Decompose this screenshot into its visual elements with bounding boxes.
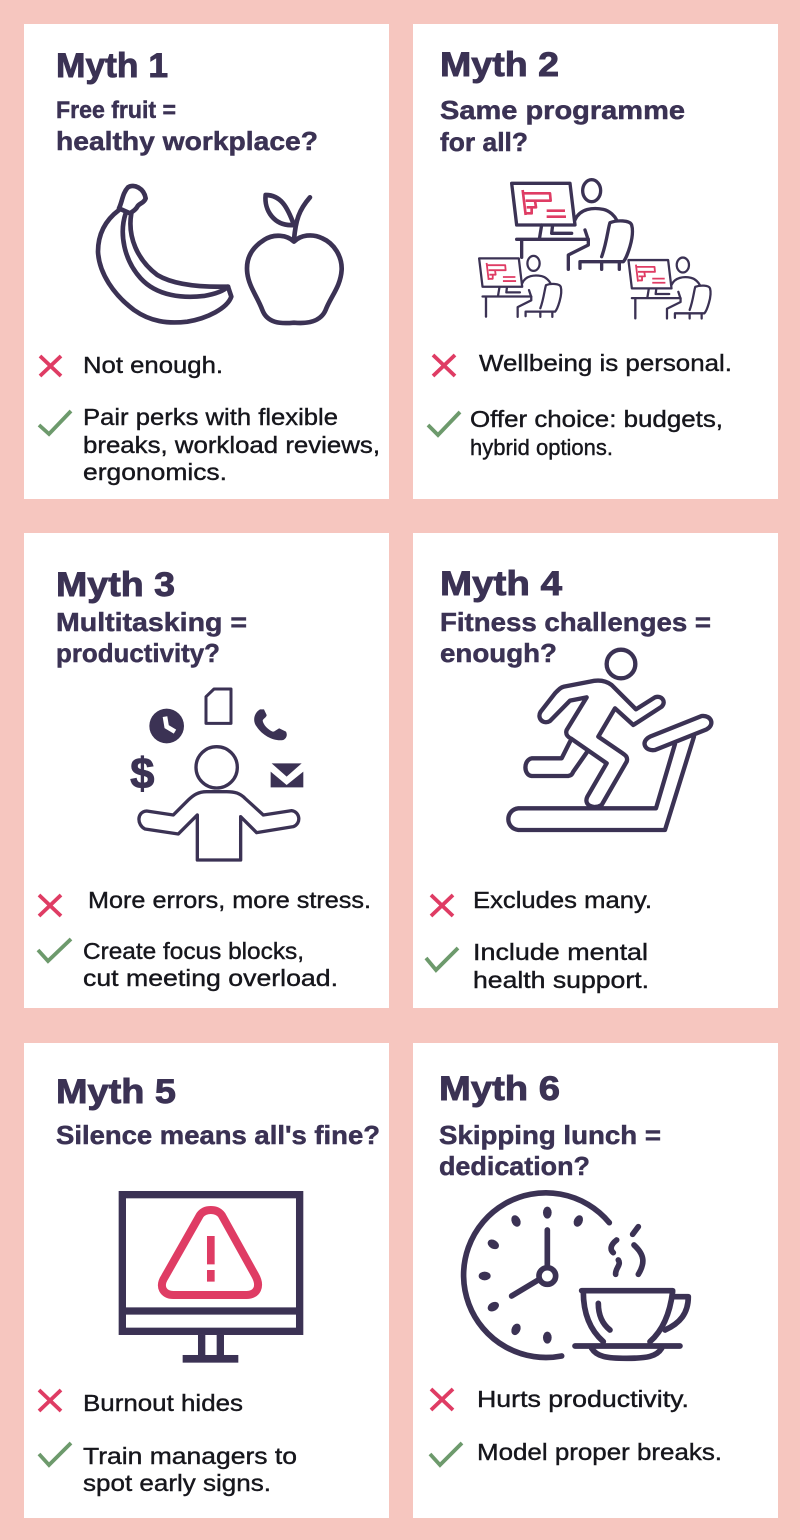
panel: myth 6: [413, 1043, 778, 1518]
icon: banana and apple: [98, 186, 342, 323]
icon: cross: [431, 1389, 453, 1410]
subheading: myth 3: [56, 607, 247, 668]
panel: myth 4: [413, 533, 778, 1008]
icon: cross: [433, 355, 455, 376]
heading: myth 3: Myth 3: [56, 566, 175, 604]
subheading: myth 1: Free fruit =: [56, 97, 176, 124]
subheading: myth 4: Fitness challenges =: [440, 607, 711, 637]
subheading: myth 6: dedication?: [439, 1151, 590, 1181]
icon: clock and coffee cup: [464, 1193, 688, 1358]
icon: people at computers: [479, 180, 711, 319]
text: myth 1 solution: breaks, workload reviews,: [83, 432, 380, 458]
text: myth 1 solution: [83, 404, 380, 485]
text: myth 6 problem: Hurts productivity.: [477, 1386, 689, 1412]
subheading: myth 2: for all?: [440, 127, 528, 157]
text: myth 2 solution: [470, 406, 723, 460]
subheading: myth 4: enough?: [440, 638, 557, 668]
icon: person juggling tasks: $: [130, 750, 154, 798]
text: myth 1 solution: ergonomics.: [83, 459, 227, 485]
heading: myth 1: Myth 1: [56, 47, 168, 85]
text: myth 5 problem: Burnout hides: [83, 1390, 243, 1416]
icon: monitor with warning: [122, 1195, 300, 1363]
icon: cross: [40, 356, 61, 376]
icon: check: [430, 1443, 462, 1465]
subheading: myth 3: Multitasking =: [56, 607, 247, 637]
subheading: myth 5: Silence means all's fine?: [56, 1120, 380, 1150]
text: myth 2 problem: Wellbeing is personal.: [479, 350, 732, 376]
text: myth 4 solution: health support.: [473, 967, 649, 993]
text: myth 4 problem: Excludes many.: [473, 887, 652, 913]
icon: cross: [431, 895, 453, 916]
subheading: myth 3: productivity?: [56, 638, 220, 668]
text: myth 2 solution: hybrid options.: [470, 435, 613, 460]
text: myth 4 solution: Include mental: [473, 939, 648, 965]
text: myth 3 solution: [83, 938, 338, 991]
icon: runner on treadmill: [508, 650, 711, 830]
heading: myth 5: Myth 5: [56, 1073, 176, 1111]
text: myth 1 solution: Pair perks with flexible: [83, 404, 338, 430]
icon: cross: [39, 895, 61, 916]
icon: check: [39, 411, 71, 434]
subheading: myth 4: [440, 607, 711, 668]
panel: myth 3: [24, 533, 389, 1008]
subheading: myth 6: [439, 1120, 661, 1181]
panel: myth 2: [413, 24, 778, 499]
icon: check: [39, 1443, 71, 1465]
panel: myth 5: [24, 1043, 389, 1518]
text: myth 5 solution: [83, 1443, 297, 1496]
subheading: myth 6: Skipping lunch =: [439, 1120, 661, 1150]
text: myth 3 solution: Create focus blocks,: [83, 938, 304, 964]
text: myth 4 solution: [473, 939, 649, 993]
text: myth 6 solution: Model proper breaks.: [477, 1439, 722, 1465]
text: myth 3 solution: cut meeting overload.: [83, 965, 338, 991]
subheading: myth 2: Same programme: [440, 95, 685, 125]
icon: check: [428, 412, 460, 435]
subheading: myth 2: [440, 95, 685, 157]
text: myth 3 problem: More errors, more stress.: [88, 887, 371, 913]
heading: myth 6: Myth 6: [439, 1070, 560, 1108]
icon: check: [38, 939, 71, 961]
text: myth 1 problem: Not enough.: [83, 352, 223, 378]
text: myth 5 solution: Train managers to: [83, 1443, 297, 1469]
panel: myth 1: [24, 24, 389, 499]
icon: check: [426, 948, 458, 970]
subheading: myth 1: healthy workplace?: [56, 126, 318, 156]
subheading: myth 1: [56, 97, 318, 156]
icon: cross: [39, 1390, 61, 1411]
heading: myth 4: Myth 4: [440, 565, 562, 603]
text: myth 5 solution: spot early signs.: [83, 1470, 271, 1496]
text: myth 2 solution: Offer choice: budgets,: [470, 406, 723, 432]
heading: myth 2: Myth 2: [440, 46, 559, 84]
icon: person juggling tasks: [130, 689, 303, 860]
